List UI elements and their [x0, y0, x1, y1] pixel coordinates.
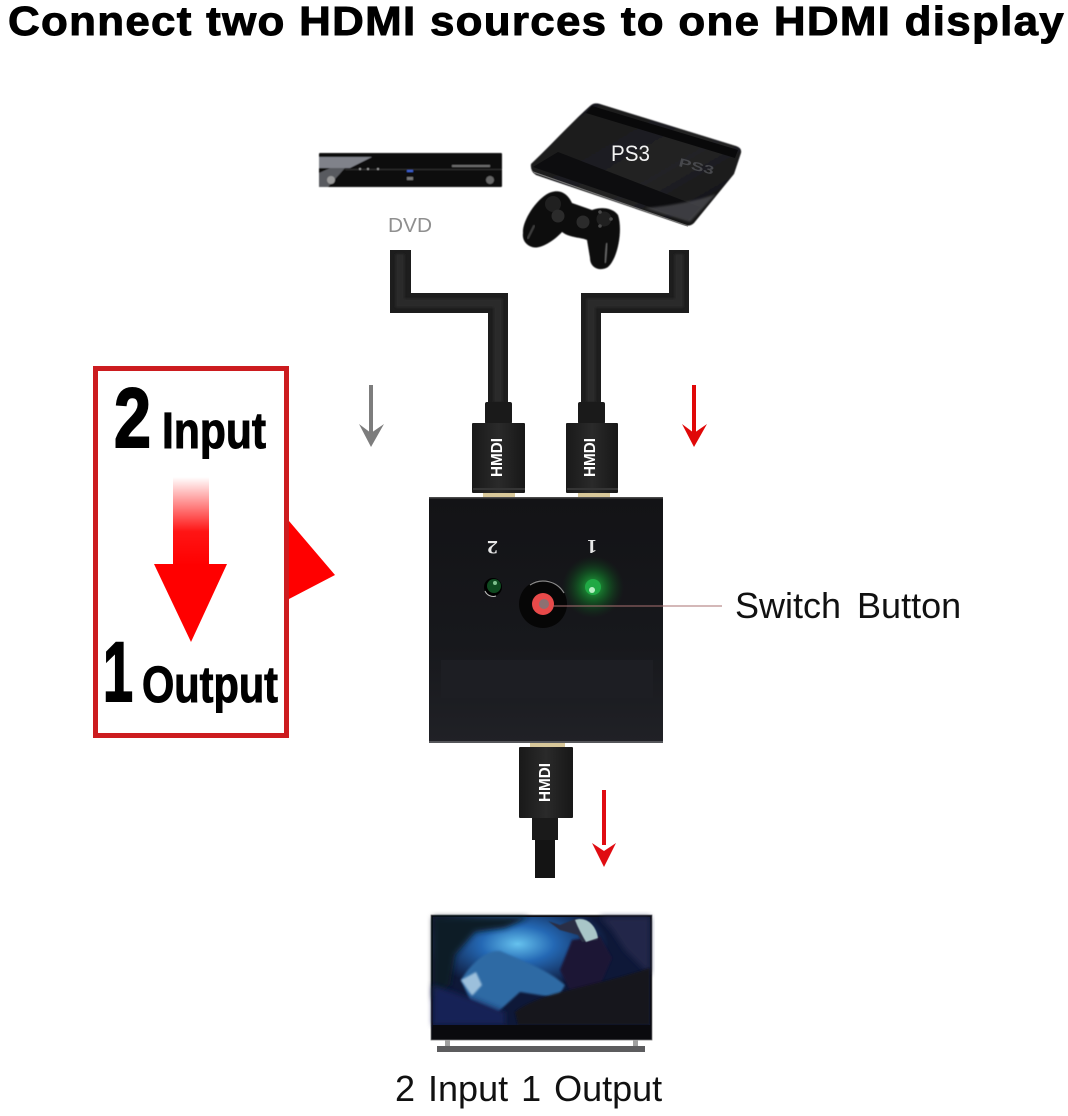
- cable: DVD to port 2: [390, 250, 508, 402]
- switch button: [519, 580, 567, 628]
- TV game artwork: [433, 917, 650, 1039]
- cable: PS3 to port 1: [581, 250, 689, 402]
- text: Output: Output: [142, 656, 278, 713]
- connector: right HDMI plug: [566, 402, 618, 498]
- TV stand and soundbar: [445, 1040, 450, 1046]
- PS3 logo: PS3: [677, 155, 716, 178]
- LED 2: [484, 578, 502, 596]
- connector: left HDMI plug: HMDI: [489, 438, 506, 477]
- connector: bottom HDMI plug: HMDI: [537, 763, 554, 802]
- label: Switch Button: Switch Button: [735, 585, 961, 626]
- PS3 label: PS3: [611, 141, 650, 166]
- connector: left HDMI plug: [472, 402, 525, 498]
- connector: right HDMI plug: HMDI: [582, 438, 599, 477]
- icon: game controller: [523, 191, 620, 269]
- icon: DVD player: [319, 153, 502, 187]
- connector: bottom HDMI plug: [519, 741, 573, 878]
- icon: PS3 console: [531, 103, 741, 226]
- port label 2: 2: [487, 536, 498, 557]
- number 2: 2: [114, 371, 151, 465]
- callout line: [553, 605, 722, 607]
- gradient arrow: [154, 477, 227, 642]
- LED 1: [562, 556, 624, 618]
- number 1: 1: [103, 625, 133, 719]
- pointer triangle: [289, 521, 335, 599]
- label: DVD: DVD: [388, 214, 432, 237]
- switch box: [429, 497, 663, 743]
- arrow: output red down: [592, 790, 616, 867]
- caption: 2 Input 1 Output: [395, 1068, 662, 1109]
- icon: TV display: [431, 915, 652, 1052]
- port label 1: 1: [587, 535, 597, 557]
- arrow: red down: [682, 385, 707, 447]
- panel: 2 input 1 output: [96, 368, 335, 736]
- arrow: grey down: [359, 385, 384, 447]
- text: Input: Input: [162, 402, 266, 459]
